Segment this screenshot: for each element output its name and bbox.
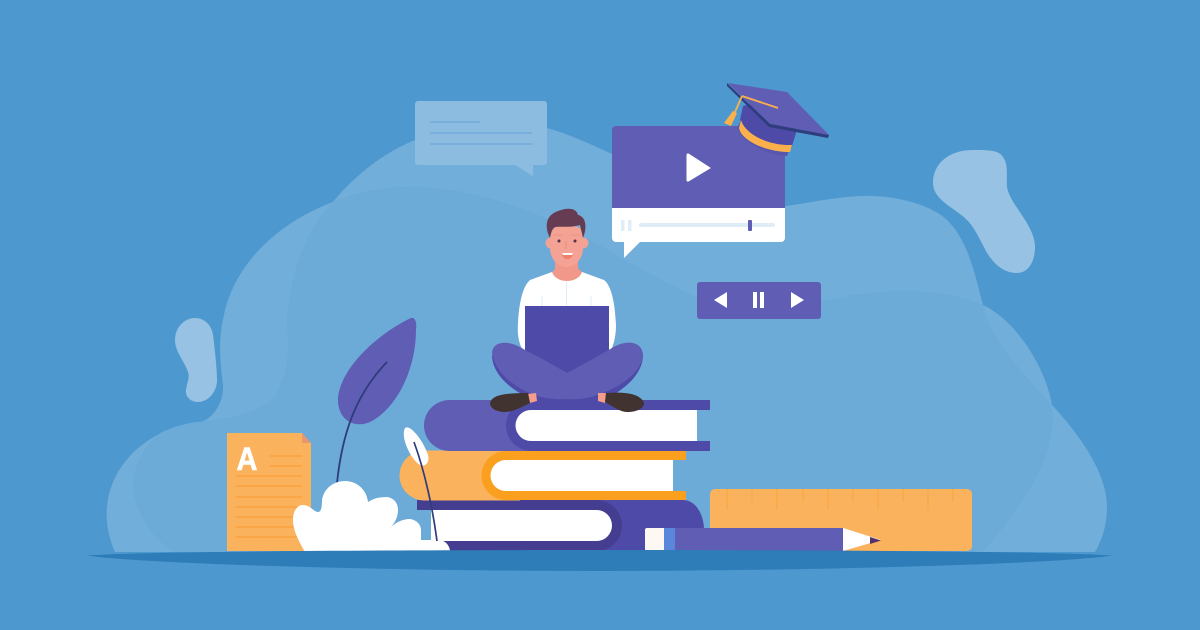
video player card <box>612 126 785 258</box>
ground shadow <box>87 550 1112 571</box>
white bush <box>293 481 450 552</box>
icon: graduation cap <box>724 83 829 156</box>
blob: left <box>175 318 217 402</box>
blob: upper right <box>933 150 1035 273</box>
book: bottom <box>417 500 704 551</box>
ruler <box>710 489 972 551</box>
shoes <box>528 393 537 403</box>
letter A: A <box>236 441 258 477</box>
stack of books <box>400 400 710 551</box>
background cloud blobs <box>107 124 1107 552</box>
speech bubble: text <box>415 101 547 176</box>
book: middle <box>400 450 686 500</box>
head <box>546 209 588 267</box>
small plant <box>404 427 437 541</box>
icon: play button <box>687 154 710 181</box>
media controls <box>697 282 821 319</box>
document page <box>227 433 311 551</box>
progress bar <box>621 220 775 231</box>
shirt <box>518 272 616 352</box>
person <box>490 209 644 412</box>
legs crossed <box>492 355 643 404</box>
plant leaf: large <box>337 318 416 483</box>
pencil <box>645 528 881 551</box>
trousers lap <box>548 363 587 373</box>
book: top <box>424 400 710 451</box>
neck <box>552 255 582 281</box>
laptop <box>525 306 609 364</box>
